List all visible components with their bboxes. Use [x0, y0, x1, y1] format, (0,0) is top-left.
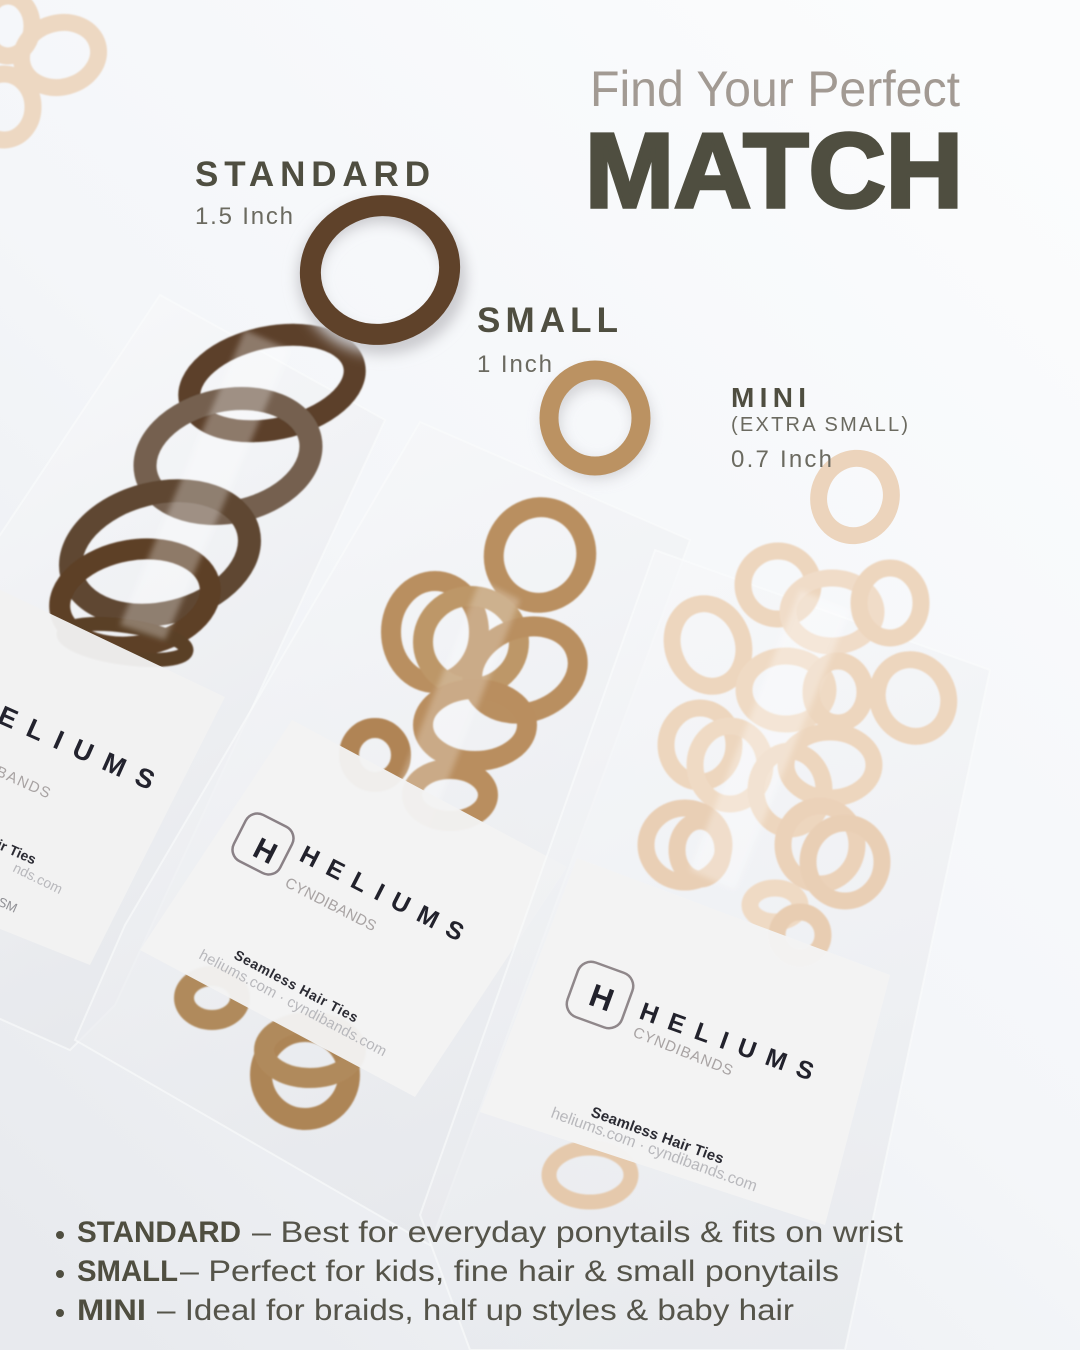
mini logo and text: H [585, 977, 619, 1018]
mini label band [480, 858, 890, 1225]
small label: 1 Inch [477, 351, 552, 378]
standard bag [0, 295, 385, 1050]
small bag [75, 422, 690, 1245]
mini logo and text [549, 958, 817, 1195]
size descriptions [56, 1216, 904, 1327]
small ring sample [549, 370, 643, 470]
small logo and text: CYNDIBANDS [282, 874, 379, 935]
small logo and text [196, 809, 468, 1060]
mini description: MINI [77, 1294, 146, 1327]
small logo and text: H [248, 832, 282, 871]
mini label: 0.7 Inch [731, 446, 832, 473]
mini label [731, 382, 908, 473]
mini logo and text: Seamless Hair Ties [589, 1104, 726, 1168]
small rings in bag [184, 494, 600, 1119]
loose rings top left [0, 0, 106, 140]
mini logo and text: CYNDIBANDS [631, 1024, 735, 1079]
standard label band [0, 585, 225, 965]
standard label: 1.5 Inch [195, 203, 293, 230]
mini logo and text: HELIUMS [636, 997, 817, 1086]
small bag gloss [380, 580, 520, 850]
small logo and text: heliums.com · cyndibands.com [196, 947, 390, 1060]
mini logo and text: heliums.com · cyndibands.com [549, 1105, 759, 1195]
small description: SMALL [77, 1255, 178, 1288]
standard label [195, 155, 430, 230]
standard label: STANDARD [195, 155, 430, 194]
mini label: (EXTRA SMALL) [731, 414, 908, 436]
small logo and text: HELIUMS [295, 840, 468, 947]
title: Find Your Perfect [590, 61, 960, 117]
small logo and text: Seamless Hair Ties [232, 947, 361, 1026]
mini bag gloss [690, 590, 850, 890]
mini bag [420, 550, 990, 1350]
standard bag: nds.com [11, 859, 65, 897]
title: MATCH [585, 112, 963, 230]
mini description: – Ideal for braids, half up styles & baby hair [157, 1294, 794, 1327]
standard bag gloss [120, 330, 290, 640]
small description: – Perfect for kids, fine hair & small ponytails [180, 1255, 839, 1288]
small label band [140, 720, 567, 1097]
standard description: – Best for everyday ponytails & fits on wrist [252, 1216, 904, 1249]
mini ring sample [808, 448, 902, 546]
standard description: STANDARD [77, 1216, 241, 1249]
small label [477, 301, 618, 378]
standard description [56, 1216, 904, 1249]
standard ring sample [296, 190, 464, 350]
title [585, 61, 963, 230]
small label: SMALL [477, 301, 618, 340]
mini rings in bag [549, 551, 961, 1202]
mini label: MINI [731, 382, 806, 413]
standard rings in bag [52, 321, 364, 666]
